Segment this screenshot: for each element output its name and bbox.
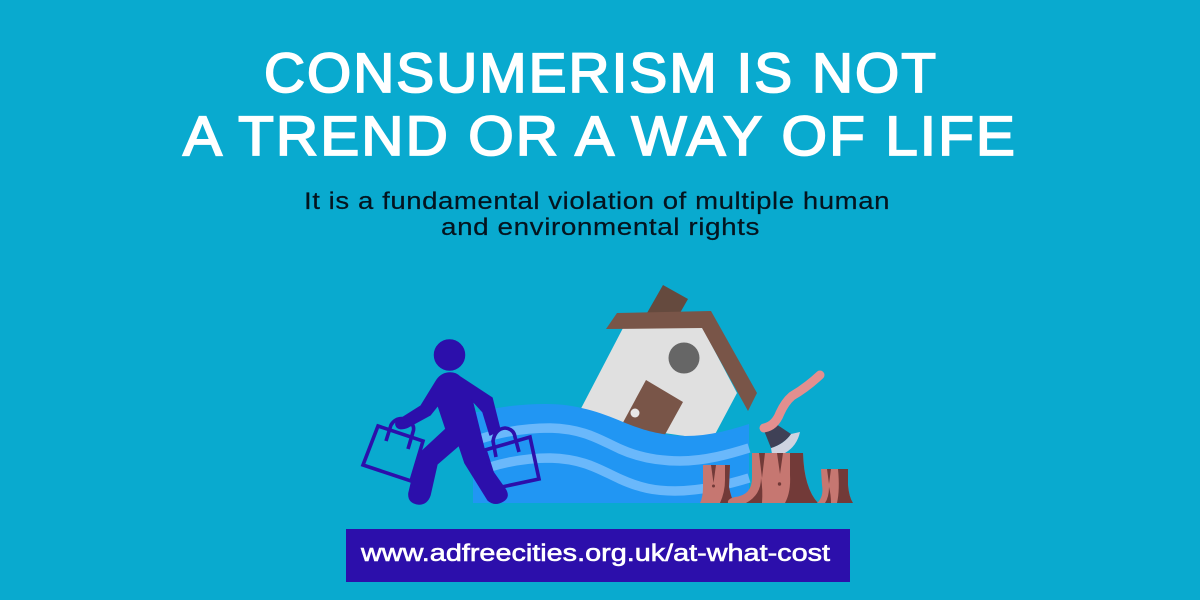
title bbox=[183, 41, 1017, 167]
title: A TREND OR A WAY OF LIFE bbox=[183, 104, 1017, 167]
url banner: www.adfreecities.org.uk/at-what-cost bbox=[360, 540, 830, 567]
icon: middle stump bbox=[728, 453, 818, 503]
title: CONSUMERISM IS NOT bbox=[264, 41, 938, 104]
icon: axe and tree stumps bbox=[700, 375, 853, 503]
icon: axe bbox=[763, 375, 820, 454]
illustration: house in flood bbox=[473, 285, 757, 503]
icon: left shopping bag bbox=[363, 419, 423, 481]
icon: house bbox=[575, 285, 757, 440]
url banner bbox=[346, 529, 850, 582]
icon: left stump bbox=[700, 465, 734, 503]
subtitle: and environmental rights bbox=[441, 214, 760, 241]
icon: right stump bbox=[817, 469, 853, 503]
icon: flood water bbox=[473, 404, 749, 503]
icon: shopper with bags bbox=[363, 340, 539, 504]
person bbox=[396, 340, 507, 504]
subtitle: It is a fundamental violation of multiple human bbox=[304, 188, 890, 215]
subtitle bbox=[304, 188, 890, 241]
icon: right shopping bag bbox=[485, 428, 539, 488]
